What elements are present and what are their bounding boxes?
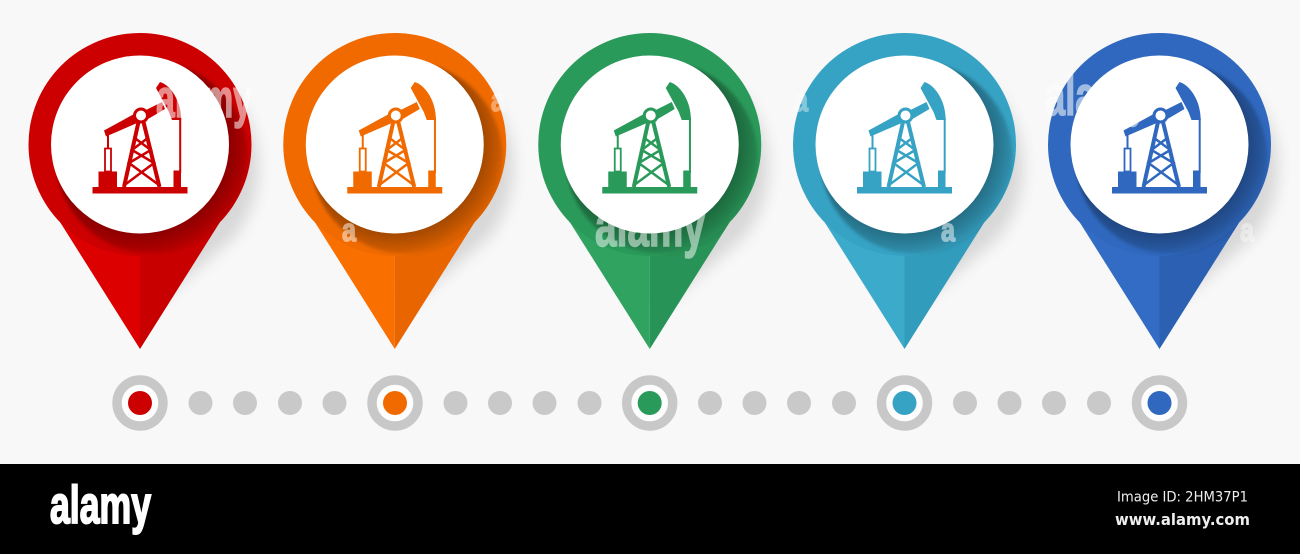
white disc xyxy=(561,56,739,234)
logo: alamy: alamy xyxy=(50,476,151,535)
watermarks xyxy=(156,64,1254,259)
pin head ring xyxy=(283,33,506,256)
watermark: teal lower: a xyxy=(941,212,955,248)
timeline node: red xyxy=(117,380,163,426)
watermark: orange lower: a xyxy=(342,212,356,248)
pin head ring xyxy=(538,33,761,256)
timeline dots xyxy=(117,380,1182,426)
pin cone right half xyxy=(650,222,730,349)
pin cone left half xyxy=(570,222,650,349)
pin head ring xyxy=(1048,33,1271,256)
pin: blue xyxy=(1048,33,1278,349)
pin: red xyxy=(28,33,258,349)
pin: teal xyxy=(793,33,1023,349)
website: www.alamy.com xyxy=(1115,510,1250,529)
watermark: orange upper: a xyxy=(491,82,505,118)
pin head ring xyxy=(793,33,1016,256)
timeline node: orange xyxy=(372,380,418,426)
pin cast shadow xyxy=(1081,86,1278,306)
pin cone left half xyxy=(60,222,140,349)
pin cone right half xyxy=(395,222,475,349)
watermark: green: alamy xyxy=(595,194,705,259)
icon: oil pump xyxy=(602,82,697,194)
pin: orange xyxy=(283,33,513,349)
watermark: blue lower: a xyxy=(1240,212,1254,248)
icon: oil pump xyxy=(347,82,442,194)
pin cone right half xyxy=(904,222,984,349)
white disc xyxy=(1070,56,1248,234)
footer bar xyxy=(0,464,1300,554)
pin: green xyxy=(538,33,768,349)
icon: oil pump xyxy=(92,82,188,194)
disc shadow xyxy=(566,62,758,254)
pin cone right half xyxy=(1160,222,1240,349)
pin cone right half xyxy=(140,222,220,349)
watermark: teal upper: a xyxy=(794,82,808,118)
disc shadow xyxy=(820,62,1012,254)
timeline node: green xyxy=(627,380,673,426)
disc shadow xyxy=(1076,62,1268,254)
disc shadow xyxy=(56,62,248,254)
timeline node: blue xyxy=(1136,380,1182,426)
watermark: blue upper: alamy xyxy=(1045,64,1148,127)
pin cone left half xyxy=(1080,222,1160,349)
timeline node: teal xyxy=(882,380,928,426)
pin cast shadow xyxy=(572,86,768,306)
white disc xyxy=(306,56,484,234)
icon: oil pump xyxy=(857,82,952,194)
pin cast shadow xyxy=(826,86,1023,306)
white disc xyxy=(816,56,994,234)
image id: Image ID: 2HM37P1 xyxy=(1117,490,1248,506)
pin cone left half xyxy=(824,222,904,349)
pin cast shadow xyxy=(62,86,258,306)
white disc xyxy=(51,56,229,234)
watermark: red pin: alamy xyxy=(156,69,252,129)
pin cone left half xyxy=(315,222,395,349)
pin cast shadow xyxy=(317,86,513,306)
icon: oil pump xyxy=(1112,82,1207,194)
disc shadow xyxy=(311,62,503,254)
pin head ring xyxy=(28,33,252,256)
